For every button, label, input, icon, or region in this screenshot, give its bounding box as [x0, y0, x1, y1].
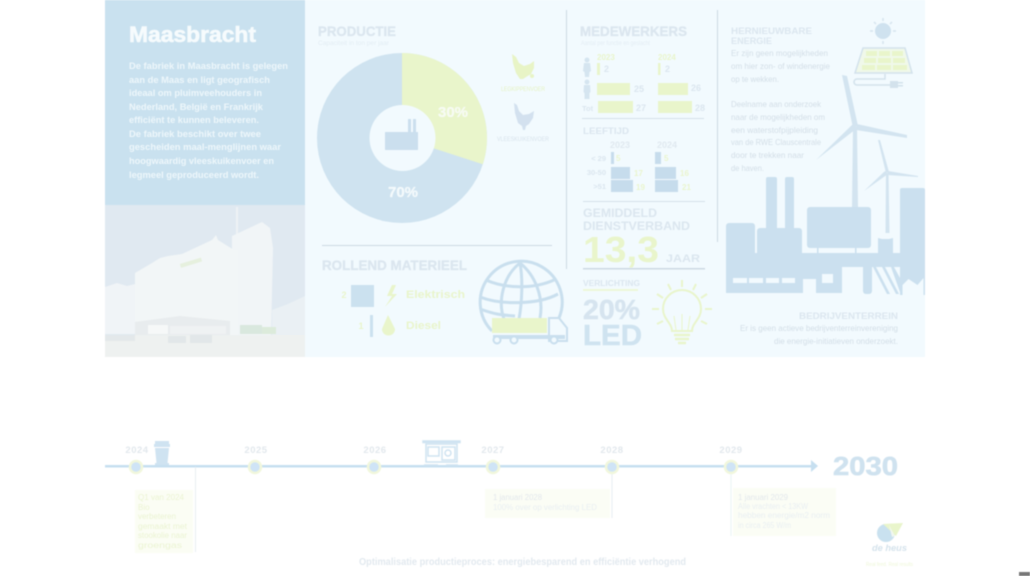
row: electric: Elektrisch: [406, 289, 465, 301]
intro text: legmeel geproduceerd wordt.: [129, 170, 259, 181]
intro text: Nederland, België en Frankrijk: [129, 102, 264, 113]
intro text: gescheiden maal-menglijnen waar: [129, 142, 281, 153]
note: 2024: gemaakt met: [138, 522, 188, 531]
note: 2029: in circa 265 W/m: [738, 521, 791, 530]
text: renewable energy: naar de mogelijkheden om: [731, 112, 825, 122]
chart: age: [583, 126, 691, 192]
chart: age: 16: [680, 169, 689, 178]
caption: Optimalisatie productieproces: energiebesparend en efficiëntie verhogend: [359, 557, 686, 568]
icon: globe and truck: [480, 261, 567, 344]
heading: renewable energy: ENERGIE: [731, 36, 772, 46]
chart: age: < 29: [591, 154, 606, 163]
icon: industrial site: [726, 177, 925, 295]
timeline years: 2024: [125, 445, 149, 456]
stat: average years of service: GEMIDDELD: [583, 206, 657, 220]
chart: age: 5: [616, 154, 621, 163]
timeline years: 2026: [363, 445, 387, 456]
stat: lighting: LED: [583, 320, 642, 352]
heading: Leeftijd: LEEFTIJD: [583, 126, 630, 136]
timeline years: 2027: [481, 445, 505, 456]
timeline axis with arrow: [105, 460, 818, 472]
timeline: [105, 441, 898, 568]
chart: staff per year: Tot: [582, 104, 594, 113]
note: 2024: Q1 van 2024: [138, 493, 185, 502]
chart: staff per year: 26: [691, 83, 701, 93]
donut chart: 70%: [388, 184, 418, 201]
icon: woman: [583, 58, 591, 77]
text: renewable energy: van de RWE Clauscentrale: [731, 137, 821, 147]
chart: age: 19: [636, 183, 645, 192]
logo: de heus: Real feed. Real results: [866, 562, 913, 568]
main panel background: [305, 0, 925, 357]
chart: age: 2024: [657, 140, 677, 150]
heading: Rollend materieel: ROLLEND MATERIEEL: [322, 258, 467, 273]
text: renewable energy: de haven.: [731, 163, 764, 173]
text: industrial site: Er is geen actieve bedrijventerreinvereniging: [740, 323, 898, 333]
subheading: Aantal per functie en geslacht: [581, 41, 650, 47]
intro text: aan de Maas en ligt geografisch: [129, 75, 270, 86]
stat: lighting: 20%: [583, 294, 640, 325]
text: renewable energy: [731, 48, 830, 173]
row: electric: [341, 285, 465, 307]
stat: lighting: VERLICHTING: [583, 279, 640, 288]
icon: machine: [423, 441, 460, 465]
icon: broiler with label: VLEESKUIKENVOER: [497, 137, 550, 143]
icon: factory: [385, 119, 418, 150]
chart: age: 5: [664, 154, 669, 163]
icon: man: [584, 80, 590, 99]
note: 2028: 100% over op verlichting LED: [493, 503, 597, 512]
stat: average years of service: 13,3: [583, 229, 659, 270]
icon: sun and solar panel: [854, 18, 912, 88]
note: 2029: hebben energie/m2 norm: [738, 511, 830, 520]
chart: age: 21: [682, 183, 691, 192]
chart: age: 2023: [610, 140, 630, 150]
note: 2024: groengas: [138, 541, 182, 550]
stat: average years of service: DIENSTVERBAND: [583, 219, 690, 233]
logo: de heus: [866, 523, 913, 568]
panel: Rollend materieel: [322, 258, 567, 344]
text: renewable energy: een waterstofpijpleiding: [731, 125, 818, 135]
icon: wind turbines: [816, 75, 918, 233]
note: 2029: Alle vrachten < 13KW: [738, 502, 808, 511]
chart: age: 30-50: [587, 168, 606, 177]
text: renewable energy: Er zijn geen mogelijkheden: [731, 48, 828, 58]
icon: silo cup: [154, 441, 170, 465]
text: industrial site: [740, 311, 898, 346]
note: 2024: stookolie naar: [138, 531, 187, 540]
note: 2029: 1 januari 2029: [738, 493, 789, 502]
subheading: Capaciteit in ton per jaar: [318, 40, 390, 47]
chart: staff per year: 2024: [658, 53, 676, 62]
heading: Productie: PRODUCTIE: [318, 24, 396, 39]
vertical divider: [566, 10, 567, 269]
logo: de heus: de heus: [872, 543, 907, 553]
chart: age: >51: [593, 182, 606, 191]
chart: staff per year: 25: [634, 84, 644, 94]
stat: average years of service: [583, 206, 700, 270]
note: 2028: 1 januari 2028: [493, 493, 543, 502]
stat: lighting: [583, 279, 642, 352]
intro text: hoogwaardig vleeskuikenvoer en: [129, 156, 274, 167]
chart: staff per year: 27: [636, 103, 646, 113]
photo: factory Maasbracht: [105, 205, 305, 357]
row: diesel: Diesel: [406, 320, 441, 332]
timeline nodes: [130, 461, 737, 473]
panel: Medewerkers: [580, 24, 712, 352]
timeline years: 2028: [600, 445, 624, 456]
intro text: De fabriek in Maasbracht is gelegen: [129, 61, 288, 72]
intro text: ideaal om pluimveehouders in: [129, 88, 262, 99]
text: industrial site: BEDRIJVENTERREIN: [799, 311, 898, 322]
row: diesel: 1: [358, 321, 364, 331]
icon: laying hen with label: LEGKIPPENVOER: [501, 87, 546, 93]
chart: staff per year: 28: [695, 103, 705, 113]
intro text: [129, 61, 288, 181]
corner mark: [1019, 572, 1030, 576]
panel: Productie: [317, 24, 550, 223]
note: 2024: [135, 467, 196, 553]
heading: Maasbracht: Maasbracht: [129, 22, 257, 47]
text: renewable energy: door te trekken naar: [731, 150, 804, 160]
timeline years: 2029: [719, 445, 743, 456]
text: renewable energy: op te wekken.: [731, 74, 779, 84]
end year 2030: 2030: [833, 451, 898, 481]
timeline years: 2025: [244, 445, 268, 456]
panel: renewable energy: [726, 18, 925, 346]
note: 2024: verbeteren: [138, 512, 176, 521]
note: 2028: [485, 474, 612, 518]
icon: light bulb: [652, 280, 712, 343]
heading: renewable energy: HERNIEUWBARE: [731, 26, 812, 36]
text: renewable energy: om hier zon- of windenergie: [731, 61, 830, 71]
chart: age: 17: [634, 169, 643, 178]
note: 2029: [730, 474, 836, 536]
chart: staff per year: 2: [604, 64, 609, 74]
row: diesel: [358, 315, 441, 337]
icon: laying hen with label: [501, 54, 546, 93]
vertical divider: [717, 10, 718, 242]
note: 2024: Bio: [138, 503, 150, 512]
timeline years: [125, 445, 743, 456]
chart: staff per year: 2: [665, 64, 670, 74]
row: electric: 2: [341, 290, 347, 300]
intro text: efficiënt te kunnen beleveren.: [129, 115, 259, 126]
panel: Maasbracht intro: [105, 0, 305, 205]
heading: Medewerkers: MEDEWERKERS: [580, 24, 687, 39]
donut chart: 30%: [438, 104, 468, 121]
icon: broiler with label: [497, 103, 550, 143]
chart: staff per year: [582, 53, 705, 113]
text: renewable energy: Deelname aan onderzoek: [731, 99, 822, 109]
heading: renewable energy: [731, 26, 812, 46]
text: industrial site: die energie-initiatieven onderzoekt.: [774, 336, 898, 346]
intro text: De fabriek beschikt over twee: [129, 129, 261, 140]
stat: average years of service: JAAR: [666, 253, 700, 265]
divider: [322, 245, 552, 246]
donut chart: [317, 53, 487, 223]
chart: staff per year: 2023: [597, 53, 615, 62]
